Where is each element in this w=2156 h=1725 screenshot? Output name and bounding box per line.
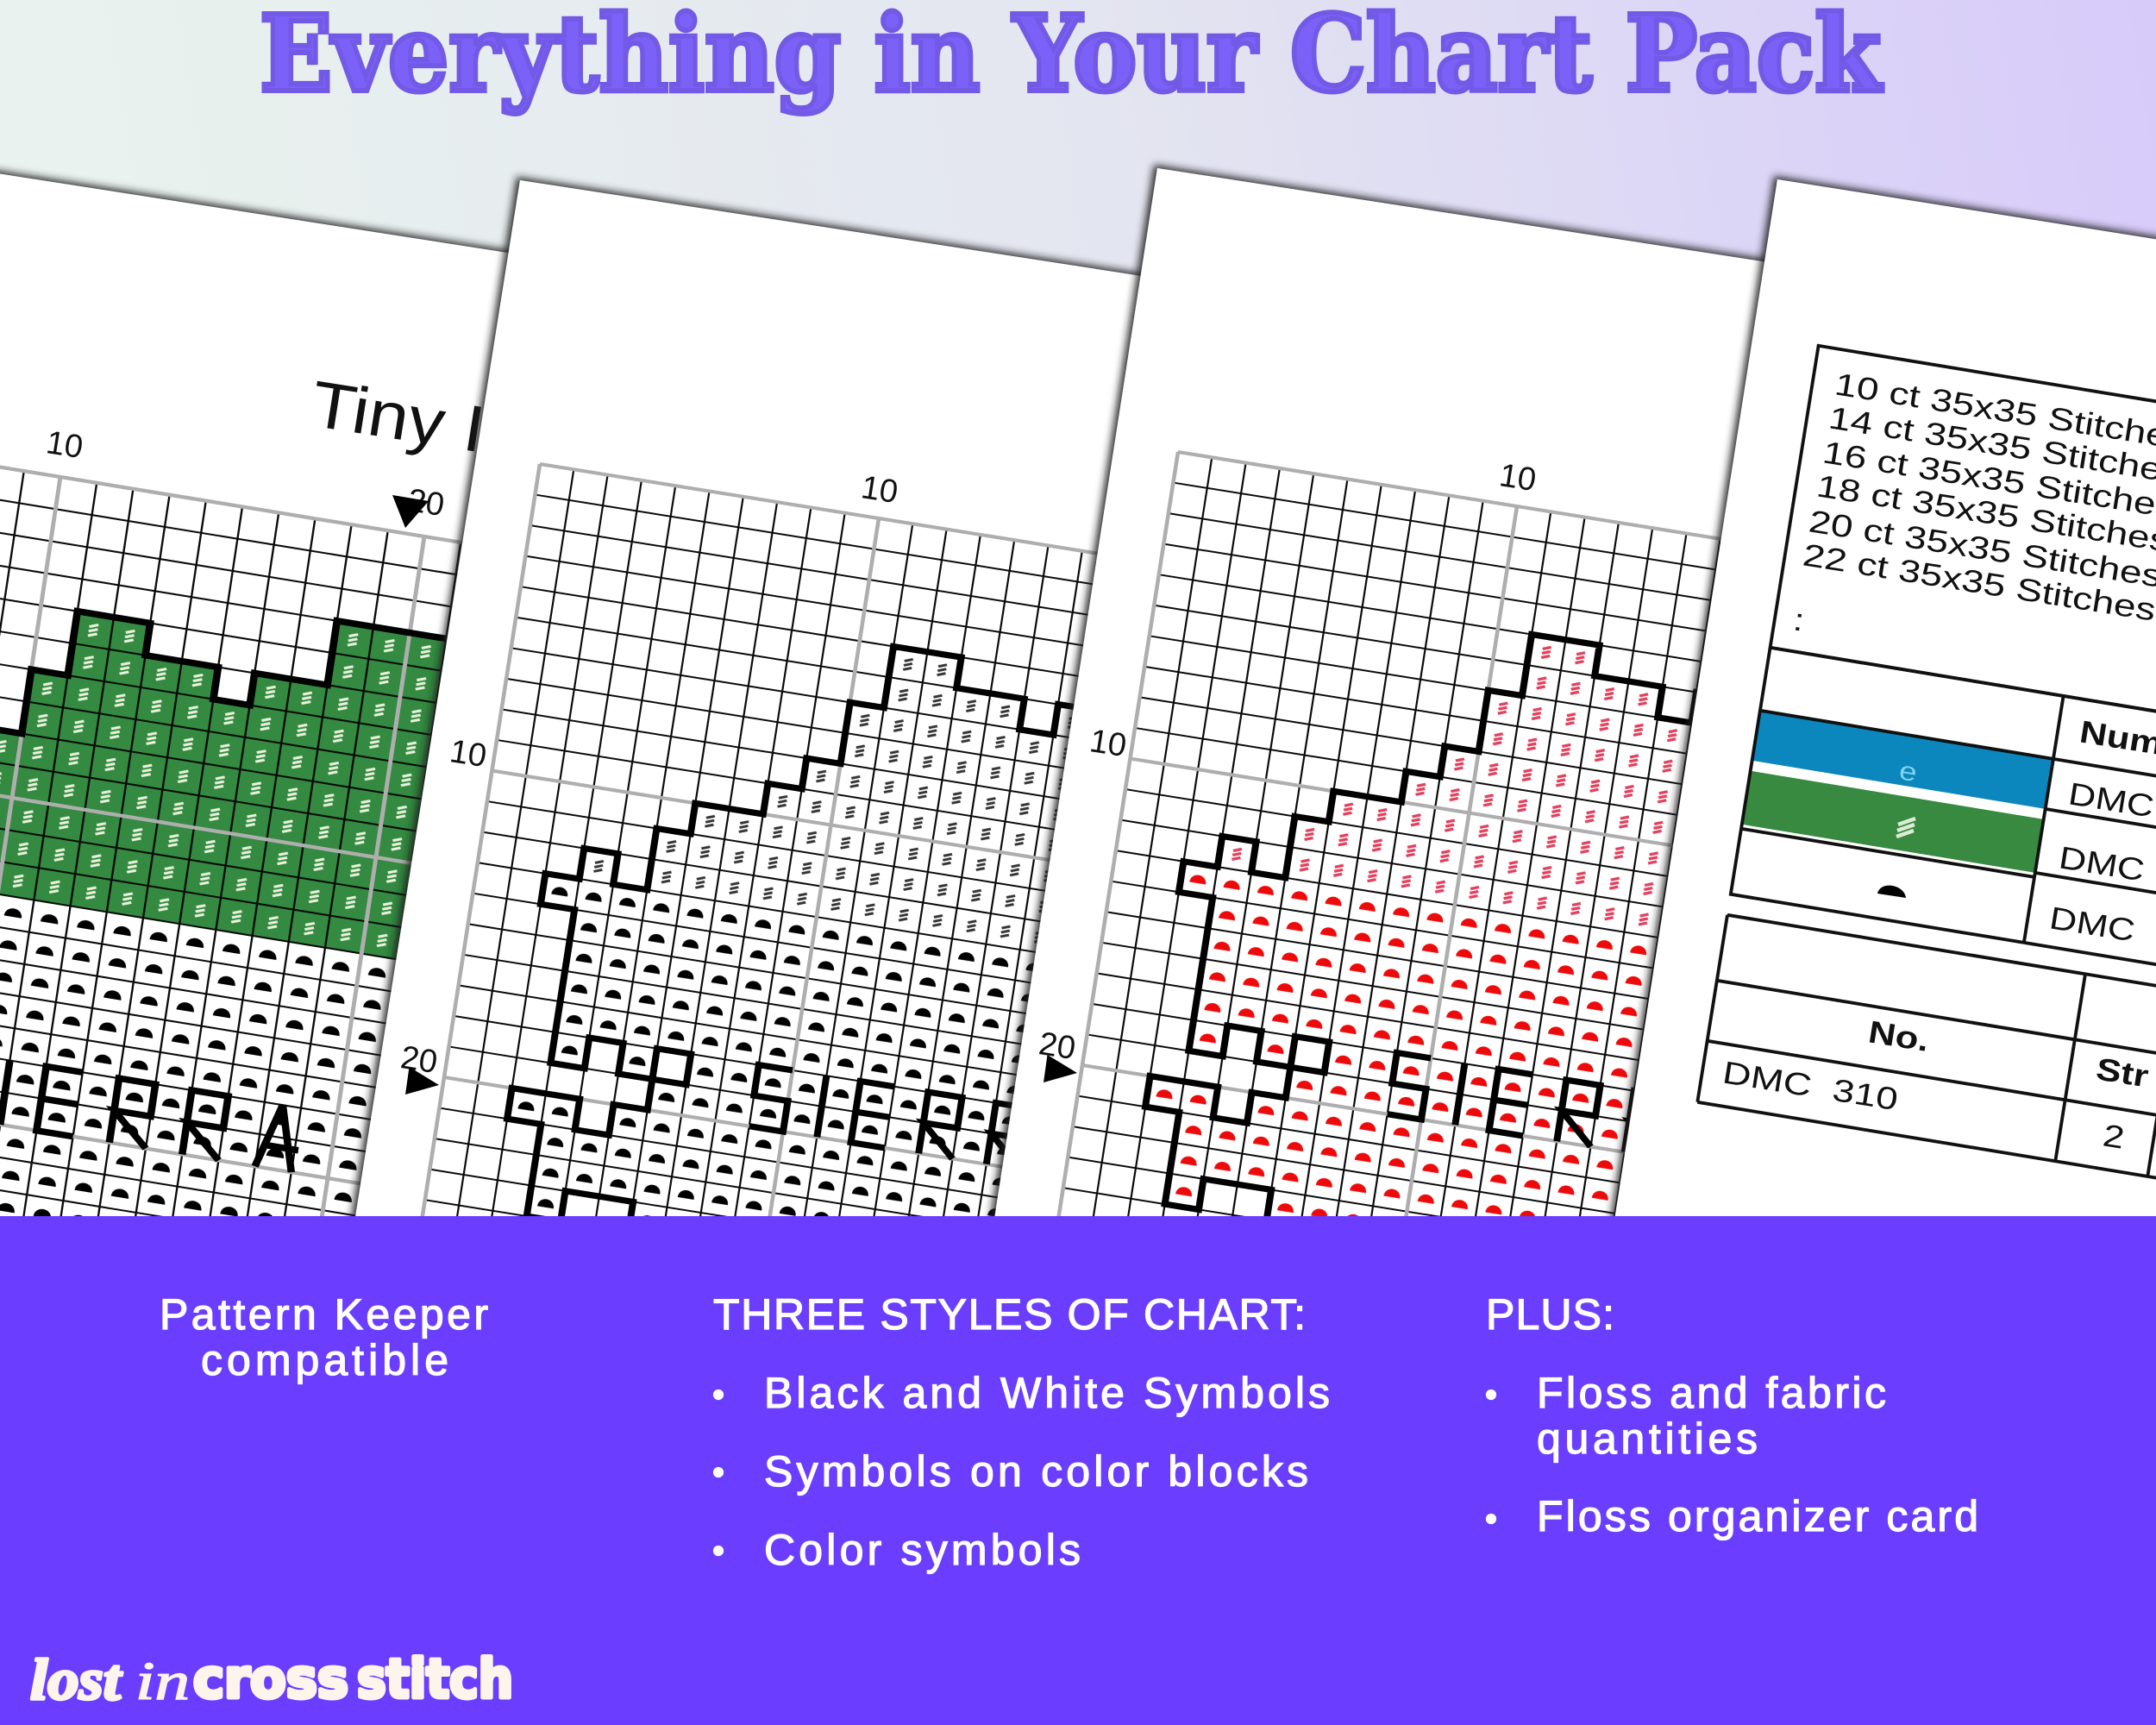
color band: green <box>1742 771 2044 873</box>
panel: color symbols chart page <box>969 168 2156 1607</box>
chart grid with red symbols <box>1025 452 2156 1607</box>
table header and row text: Str <box>2094 1051 2152 1095</box>
table header and row text: DMC <box>2047 900 2138 949</box>
panel: black and white symbols chart page <box>329 180 1625 1619</box>
axis labels and marker: 10 <box>1497 457 1539 499</box>
text block: three styles of chart: Black and White Symbols <box>764 1369 1330 1417</box>
text block: three styles of chart: Color symbols <box>764 1526 1081 1574</box>
chart grid with black symbols <box>386 464 1625 1619</box>
axis labels and marker: 10 <box>448 733 489 775</box>
text block: three styles of chart <box>713 1290 1330 1574</box>
text block: pattern keeper compatible: compatible <box>201 1336 448 1384</box>
logo: lost in cross stitch <box>30 1647 513 1712</box>
symbol key icons <box>1877 756 1919 898</box>
fabric size lines: 22 ct 35x35 Stitches <box>1801 536 2156 628</box>
table header and row text: DMC 310 <box>1720 1055 1901 1117</box>
text block: three styles of chart: THREE STYLES OF CHART: <box>713 1290 1306 1339</box>
text block: plus list: Floss and fabric <box>1537 1369 1886 1417</box>
axis labels and marker <box>398 469 900 1095</box>
column labels and marker <box>44 424 447 528</box>
text block: pattern keeper compatible: Pattern Keeper <box>160 1290 488 1339</box>
logo: lost in cross stitch: cross <box>193 1647 348 1710</box>
axis labels and marker <box>1037 457 1539 1082</box>
axis labels and marker: 10 <box>1087 723 1129 764</box>
axis labels and marker: 20 <box>398 1039 440 1081</box>
fabric size lines: : <box>1791 602 1807 638</box>
text block: plus list: quantities <box>1537 1414 1758 1463</box>
size box <box>1771 346 2156 747</box>
fabric size lines <box>1791 366 2156 638</box>
chart grid with green blocks <box>0 417 861 1634</box>
text block: plus list: Floss organizer card <box>1537 1492 1978 1540</box>
symbol key icons: e <box>1897 756 1919 787</box>
key tables <box>1696 346 2156 1201</box>
logo: lost in cross stitch: in <box>135 1653 190 1711</box>
color band: blue <box>1752 711 2053 809</box>
axis labels and marker: 20 <box>1037 1026 1078 1067</box>
panel: floss key page <box>1589 179 2156 1380</box>
text block: pattern keeper compatible <box>160 1290 488 1384</box>
panel: chart page with symbols on color blocks <box>0 134 862 1634</box>
axis labels and marker: 10 <box>859 469 900 511</box>
column labels and marker: 20 <box>405 482 447 524</box>
text block: plus list <box>1486 1290 1978 1540</box>
table header and row text <box>1720 714 2156 1156</box>
table header and row text: No. <box>1866 1014 1932 1058</box>
text block: plus list: PLUS: <box>1486 1290 1614 1339</box>
logo: lost in cross stitch: stitch <box>357 1647 513 1710</box>
background gradient <box>0 0 2156 1225</box>
thread table lines <box>1697 915 2156 1201</box>
panel: purple footer <box>0 1216 2156 1725</box>
column labels and marker: 10 <box>44 424 85 466</box>
symbol table lines <box>1730 648 2156 994</box>
table header and row text: DMC <box>2066 776 2156 825</box>
table header and row text: 2 <box>2101 1118 2127 1156</box>
fabric size lines: 20 ct 35x35 Stitches <box>1807 503 2156 594</box>
table header and row text: DMC <box>2057 840 2147 888</box>
logo: lost in cross stitch: lost <box>30 1647 122 1712</box>
page title fragment: Tiny I <box>306 367 490 466</box>
text block: three styles of chart: Symbols on color blocks <box>764 1447 1308 1496</box>
